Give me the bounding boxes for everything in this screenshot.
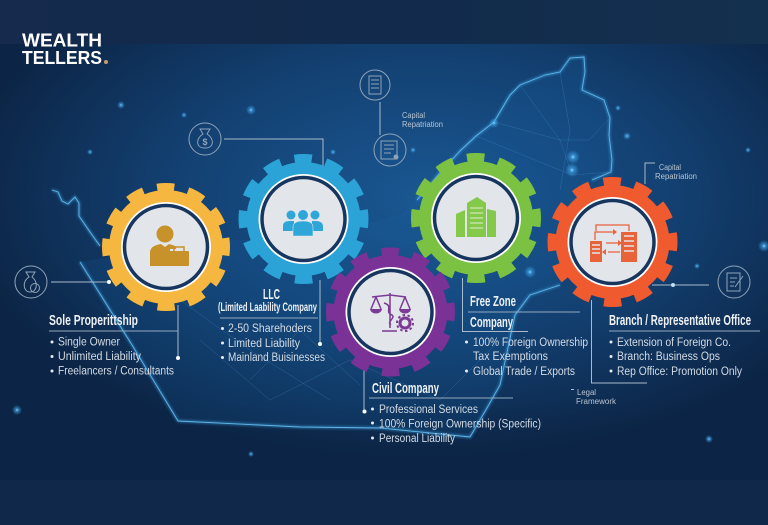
gear: civil company xyxy=(330,252,450,372)
text: free zone company: Tax Exemptions xyxy=(473,351,548,363)
label: capital repatriation top xyxy=(402,111,443,129)
icon: document with pen xyxy=(718,266,750,298)
label: legal framework xyxy=(571,388,617,406)
icon: businessman xyxy=(150,226,189,266)
glowing stars xyxy=(12,101,768,457)
text: branch office: Extension of Foreign Co. xyxy=(617,337,731,349)
text: free zone company: Free Zone xyxy=(470,293,516,310)
label: capital repatriation right: Capital xyxy=(659,163,681,172)
logo: WEALTH xyxy=(22,30,102,50)
text: civil company: Professional Services xyxy=(379,404,478,416)
text: free zone company: Global Trade / Exports xyxy=(473,366,575,378)
logo: TELLERS xyxy=(22,47,102,68)
text: civil company xyxy=(369,380,541,445)
icon: scales and gear xyxy=(370,293,413,331)
label: legal framework: Legal xyxy=(577,388,596,397)
text: LLC: Mainland Buisinesses xyxy=(228,352,325,364)
text: civil company: Personal Liability xyxy=(379,433,455,445)
text: LLC: 2-50 Sharehoders xyxy=(228,323,312,335)
icon: group of people xyxy=(283,210,323,236)
text: sole proprietorship: Unlimited Liability xyxy=(58,351,141,363)
icon: document top xyxy=(360,70,390,100)
text: civil company: 100% Foreign Ownership (Specific) xyxy=(379,418,541,430)
icon: coin bag xyxy=(15,266,47,298)
label: capital repatriation right: Repatriation xyxy=(655,172,697,181)
label: capital repatriation top: Capital xyxy=(402,111,425,120)
text: sole proprietorship: Freelancers / Consultants xyxy=(58,366,174,378)
icon: buildings xyxy=(456,197,496,237)
icon: office transfer xyxy=(590,225,637,262)
label: capital repatriation top: Repatriation xyxy=(402,120,443,129)
text: LLC xyxy=(218,286,325,364)
text: sole proprietorship: Single Owner xyxy=(58,336,120,348)
gear: branch office xyxy=(552,182,672,302)
text: civil company: Civil Company xyxy=(372,380,439,397)
icon: money bag xyxy=(189,123,221,155)
label: legal framework: Framework xyxy=(576,397,617,406)
text: LLC: (Limited Laability Company xyxy=(218,302,317,314)
text: LLC: Limited Liability xyxy=(228,338,300,350)
text: branch office: Rep Office: Promotion Only xyxy=(617,366,742,378)
gear: free zone xyxy=(416,158,536,278)
label: capital repatriation right xyxy=(655,163,697,181)
gear: LLC xyxy=(244,159,364,279)
text: sole proprietorship xyxy=(49,312,178,378)
icon: certificate xyxy=(374,134,406,166)
logo xyxy=(22,30,108,68)
gear: sole proprietorship xyxy=(106,188,226,306)
map of the UAE xyxy=(52,57,612,437)
text: free zone company: Company xyxy=(470,314,513,331)
text: free zone company xyxy=(465,293,588,378)
text: free zone company: 100% Foreign Ownership xyxy=(473,337,588,349)
text: branch office: Branch: Business Ops xyxy=(617,351,720,363)
text: LLC: LLC xyxy=(263,286,280,303)
icon: money bag: $ xyxy=(202,137,208,147)
connector lines xyxy=(51,102,709,414)
text: sole proprietorship: Sole Properittship xyxy=(49,312,138,329)
text: branch office xyxy=(609,312,760,378)
